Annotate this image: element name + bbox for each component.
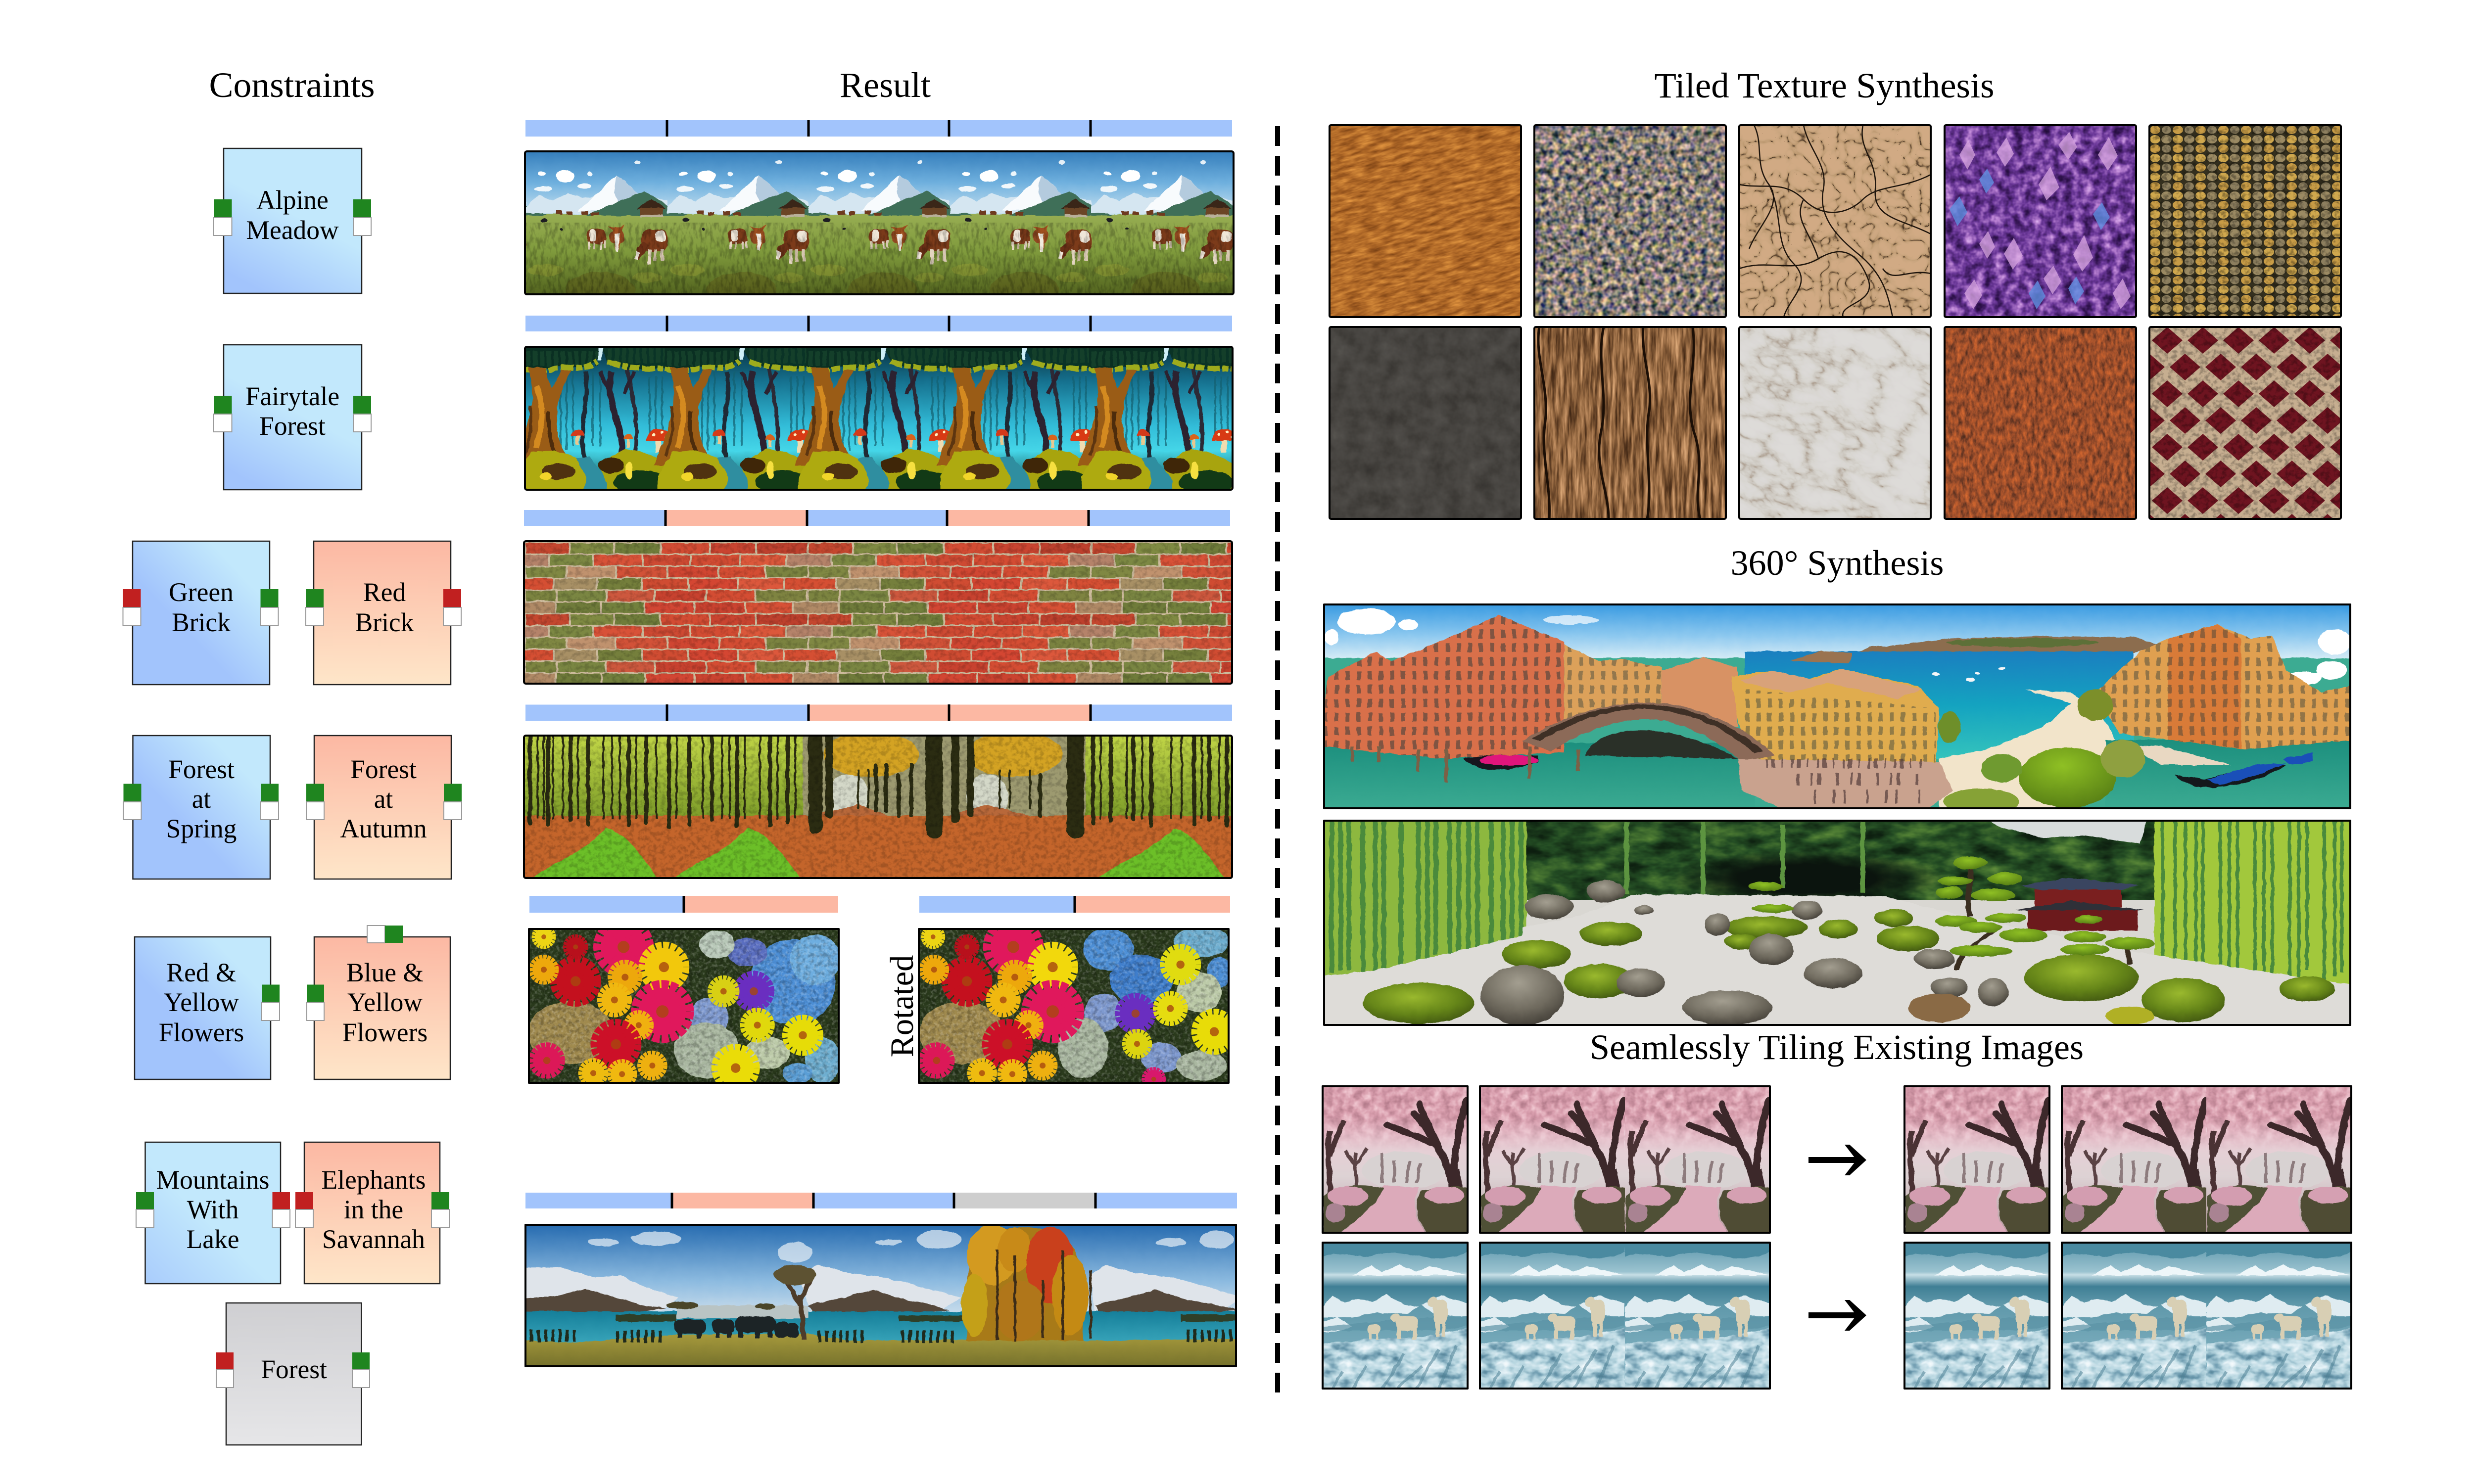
image frame: row 4: [524, 736, 1232, 878]
result image: flowers rotated: [919, 927, 1232, 1087]
panel: constraint Blue and Yellow Flowers: Yellow: [347, 987, 423, 1017]
panorama: Zen garden with bamboo: [1318, 819, 2359, 1030]
texture: amethyst crystals: [1945, 125, 2136, 317]
panel: constraint Forest at Autumn: at: [374, 784, 393, 814]
panel: constraint Elephants in the Savannah: in the: [344, 1195, 403, 1224]
panel: constraint Forest at Autumn: Autumn: [340, 814, 427, 843]
result image: green and red brick wall: [520, 538, 1237, 687]
segment bar: row 1: [525, 120, 1232, 137]
segment bar: row 6: [525, 1193, 1237, 1208]
panel: constraint Forest gray: [216, 1303, 370, 1445]
texture: marble: [1656, 244, 2015, 603]
tiled input: polar bears with seam: [1480, 1243, 1770, 1389]
panel: constraint Mountains With Lake: With: [187, 1195, 239, 1224]
panel: constraint Elephants in the Savannah: Elephants: [322, 1165, 426, 1195]
panorama: Venice harbour: [1318, 601, 2359, 814]
image frame: row 6: [525, 1225, 1236, 1366]
texture: honeycomb: [2149, 125, 2341, 317]
image frame: row 2: [525, 347, 1233, 490]
panel: constraint Mountains With Lake: Mountains: [156, 1165, 269, 1195]
panel: constraint Blue and Yellow Flowers: Flowers: [342, 1018, 428, 1047]
texture: gravel: [1534, 125, 1726, 317]
panel: constraint Forest at Spring: Spring: [166, 814, 237, 843]
panel: constraint Forest at Autumn: Forest: [350, 754, 417, 784]
output image: cherry blossom seamless: [1904, 1086, 2049, 1233]
segment bar: row 4 spring and autumn: [525, 704, 1232, 721]
panel: constraint Forest gray: Forest: [261, 1354, 327, 1384]
panel: constraint Forest at Spring: Forest: [168, 754, 235, 784]
result image: alpine meadow panorama: [526, 152, 1233, 293]
result image: flowers: [527, 928, 841, 1083]
panel: constraint Red and Yellow Flowers: Yellow: [164, 987, 239, 1017]
segment bar: flowers rotated: [919, 896, 1230, 913]
dashed divider: [1275, 126, 1280, 1400]
segment bar: flowers left: [529, 896, 838, 913]
panel: constraint Elephants in the Savannah: [295, 1142, 449, 1284]
texture: tree bark: [1534, 327, 1726, 519]
panel: constraint Fairytale Forest: Fairytale: [245, 381, 339, 411]
title: Seamlessly Tiling Existing Images: Seamlessly Tiling Existing Images: [1590, 1027, 2084, 1067]
panel: constraint Red and Yellow Flowers: [135, 937, 280, 1079]
segment bar: row 2: [525, 316, 1232, 331]
panel: constraint Forest at Spring: at: [192, 784, 211, 814]
panel: constraint Green Brick: Brick: [172, 607, 231, 637]
panel: constraint Blue and Yellow Flowers: Blue &: [346, 958, 424, 987]
texture: dark slate: [1330, 327, 1521, 519]
tiled output: cherry blossom seamless: [2062, 1086, 2351, 1233]
panel: constraint Elephants in the Savannah: Savannah: [322, 1224, 425, 1254]
panel: constraint Red Brick: Red: [363, 577, 406, 607]
result image: spring to autumn forest: [520, 732, 1237, 881]
panel: constraint Alpine Meadow: Alpine: [256, 185, 329, 215]
image frame: Zen garden: [1324, 821, 2350, 1025]
tiled output: polar bears seamless: [2062, 1243, 2351, 1389]
panel: constraint Red Brick: Brick: [355, 607, 414, 637]
panel: constraint Alpine Meadow: Meadow: [246, 215, 339, 245]
title: Constraints: Constraints: [209, 65, 375, 105]
title: Tiled Texture Synthesis: Tiled Texture Synthesis: [1655, 66, 1994, 105]
texture: cracked earth: [1739, 125, 1931, 317]
panel: constraint Red and Yellow Flowers: Flowers: [159, 1018, 244, 1047]
panel: constraint Red Brick: [306, 541, 461, 685]
label: Rotated: Rotated: [884, 955, 920, 1057]
title: Result: Result: [840, 65, 931, 105]
panel: constraint Red and Yellow Flowers: Red &: [166, 958, 237, 987]
title: 360° Synthesis: 360° Synthesis: [1731, 543, 1944, 583]
panel: constraint Green Brick: Green: [169, 577, 234, 607]
tiled input: cherry blossom with seam: [1480, 1086, 1770, 1233]
panel: constraint Fairytale Forest: Forest: [259, 411, 326, 441]
panel: constraint Forest at Autumn: [306, 736, 462, 879]
image frame: flowers left: [529, 929, 839, 1083]
arrow: cherry blossom: [1808, 1145, 1866, 1175]
image frame: row 1: [525, 151, 1234, 294]
panel: constraint Alpine Meadow: [214, 148, 371, 293]
result image: fairytale forest panorama: [526, 348, 1232, 489]
panel: constraint Mountains With Lake: [136, 1142, 290, 1284]
input image: polar bears: [1323, 1243, 1468, 1389]
texture: rust: [1945, 327, 2136, 519]
arrow: polar bears: [1808, 1300, 1866, 1331]
result image: mountains, elephants and autumn forest: [520, 1222, 1242, 1371]
panel: constraint Mountains With Lake: Lake: [187, 1224, 239, 1254]
output image: polar bears seamless: [1904, 1243, 2049, 1389]
panel: constraint Fairytale Forest: [214, 345, 371, 490]
image frame: flowers rotated: [919, 929, 1229, 1083]
texture: leather: [1261, 56, 1591, 386]
image frame: Venice: [1324, 604, 2350, 808]
texture: maroon diamonds: [2149, 327, 2341, 519]
segment bar: row 3 blue and salmon: [524, 510, 1230, 526]
panel: constraint Forest at Spring: [124, 736, 279, 879]
panel: constraint Blue and Yellow Flowers: [307, 926, 450, 1079]
input image: cherry blossom: [1323, 1086, 1468, 1233]
panel: constraint Green Brick: [123, 541, 278, 685]
image frame: row 3: [524, 541, 1232, 684]
